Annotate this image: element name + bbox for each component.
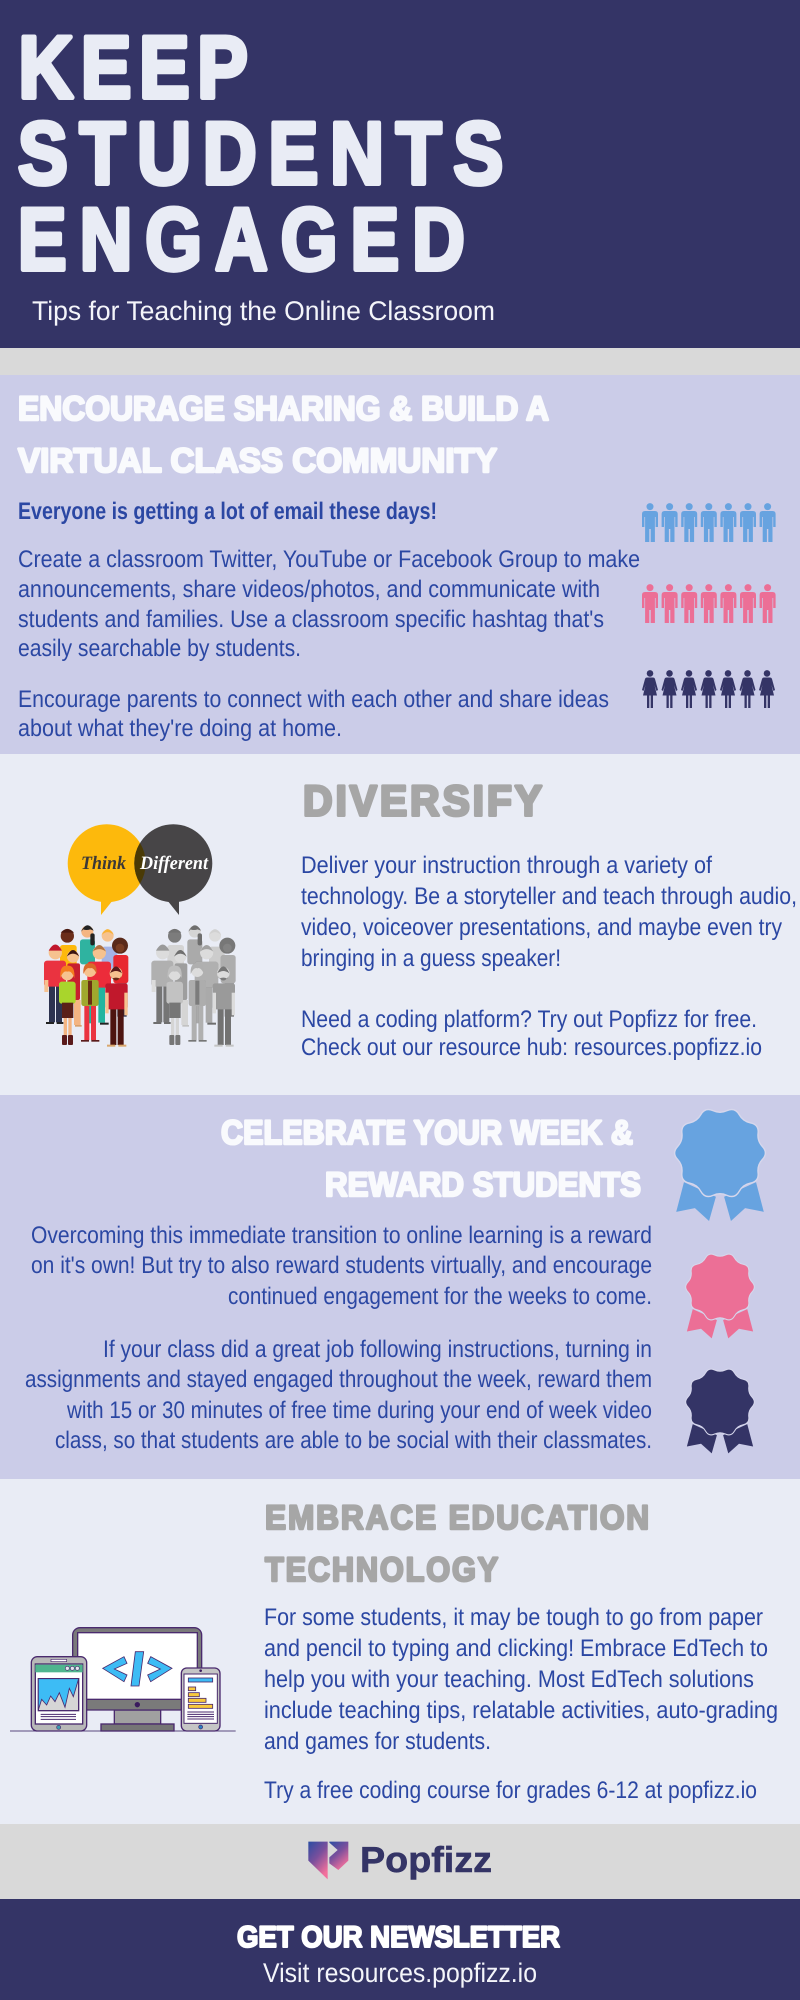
icon: pink ribbon xyxy=(686,1255,754,1338)
icon: think different speech bubbles: Think xyxy=(81,853,126,874)
text block: instruction: Deliver your instruction through a variety of xyxy=(301,852,712,879)
subtitle: Tips for Teaching the Online Classroom xyxy=(32,296,495,326)
grey divider band xyxy=(0,348,800,375)
heading: encourage sharing: VIRTUAL CLASS COMMUNITY xyxy=(18,442,497,480)
heading: celebrate: CELEBRATE YOUR WEEK & xyxy=(221,1114,633,1152)
text block: instruction: bringing in a guess speaker! xyxy=(301,945,561,972)
title xyxy=(18,18,515,288)
panel: logo band xyxy=(0,1824,800,1899)
text block: instruction xyxy=(301,852,797,972)
heading: embrace education technology: EMBRACE EDUCATION xyxy=(265,1499,651,1537)
text block: transition: continued engagement for the weeks to come. xyxy=(228,1283,652,1310)
panel: celebrate xyxy=(0,1095,800,1479)
icon: blue ribbon xyxy=(675,1110,765,1221)
illustration: devices xyxy=(10,1628,236,1731)
text: visit link: Visit resources.popfizz.io xyxy=(263,1958,537,1988)
panel: embrace education technology xyxy=(0,1479,800,1824)
text block: free time reward: assignments and stayed engaged throughout the week, reward them xyxy=(25,1366,652,1393)
heading: encourage sharing: ENCOURAGE SHARING & BUILD A xyxy=(18,390,549,428)
text block: classroom groups: announcements, share videos/photos, and communicate with xyxy=(18,576,600,603)
text block: free time reward: with 15 or 30 minutes of free time during your end of week video xyxy=(66,1397,652,1424)
logo wordmark: Popfizz xyxy=(360,1839,492,1880)
heading: embrace education technology: TECHNOLOGY xyxy=(265,1551,500,1589)
icon: navy people row xyxy=(642,670,775,708)
text block: free time reward: class, so that students are able to be social with their classmates. xyxy=(55,1427,652,1454)
panel: header xyxy=(0,0,800,348)
heading: celebrate xyxy=(221,1114,641,1204)
heading: embrace education technology xyxy=(265,1499,651,1589)
illustration: two crowds of people xyxy=(44,925,236,1047)
text block: classroom groups: Create a classroom Twitter, YouTube or Facebook Group to make xyxy=(18,546,640,573)
text block: classroom groups: students and families. Use a classroom specific hashtag that's xyxy=(18,606,604,633)
icon: blue people row xyxy=(642,503,776,542)
icon: popfizz logo mark xyxy=(308,1842,348,1879)
heading: newsletter: GET OUR NEWSLETTER xyxy=(237,1921,560,1954)
text block: transition xyxy=(31,1222,652,1310)
title: ENGAGED xyxy=(18,190,478,288)
text block: classroom groups: easily searchable by students. xyxy=(18,635,301,662)
panel: encourage sharing xyxy=(0,375,800,754)
text block: coding platform xyxy=(301,1006,762,1061)
title: KEEP xyxy=(18,18,256,116)
text block: transition: Overcoming this immediate transition to online learning is a reward xyxy=(31,1222,652,1249)
icon: pink people row xyxy=(642,584,776,623)
text block: classroom groups xyxy=(18,546,640,662)
panel: newsletter footer xyxy=(0,1899,800,2000)
heading: encourage sharing xyxy=(18,390,549,480)
panel: diversify xyxy=(0,754,800,1095)
heading: diversify: DIVERSIFY xyxy=(303,778,545,826)
bold lead sentence: Everyone is getting a lot of email these days! xyxy=(18,498,437,525)
icon: think different speech bubbles: Different xyxy=(139,853,209,874)
text block: free time reward xyxy=(25,1336,652,1454)
text block: edtech: help you with your teaching. Most EdTech solutions xyxy=(264,1666,754,1693)
text block: parents: about what they're doing at home. xyxy=(18,715,342,742)
text block: edtech xyxy=(264,1604,778,1755)
icon: navy ribbon xyxy=(686,1370,754,1453)
text block: parents xyxy=(18,686,609,742)
heading: celebrate: REWARD STUDENTS xyxy=(325,1166,641,1204)
text block: edtech: and games for students. xyxy=(264,1728,491,1755)
text block: free time reward: If your class did a great job following instructions, turning in xyxy=(103,1336,652,1363)
text block: transition: on it's own! But try to also reward students virtually, and encourage xyxy=(31,1252,652,1279)
title: STUDENTS xyxy=(18,104,515,202)
text block: parents: Encourage parents to connect with each other and share ideas xyxy=(18,686,609,713)
icon: think different speech bubbles xyxy=(68,824,212,915)
